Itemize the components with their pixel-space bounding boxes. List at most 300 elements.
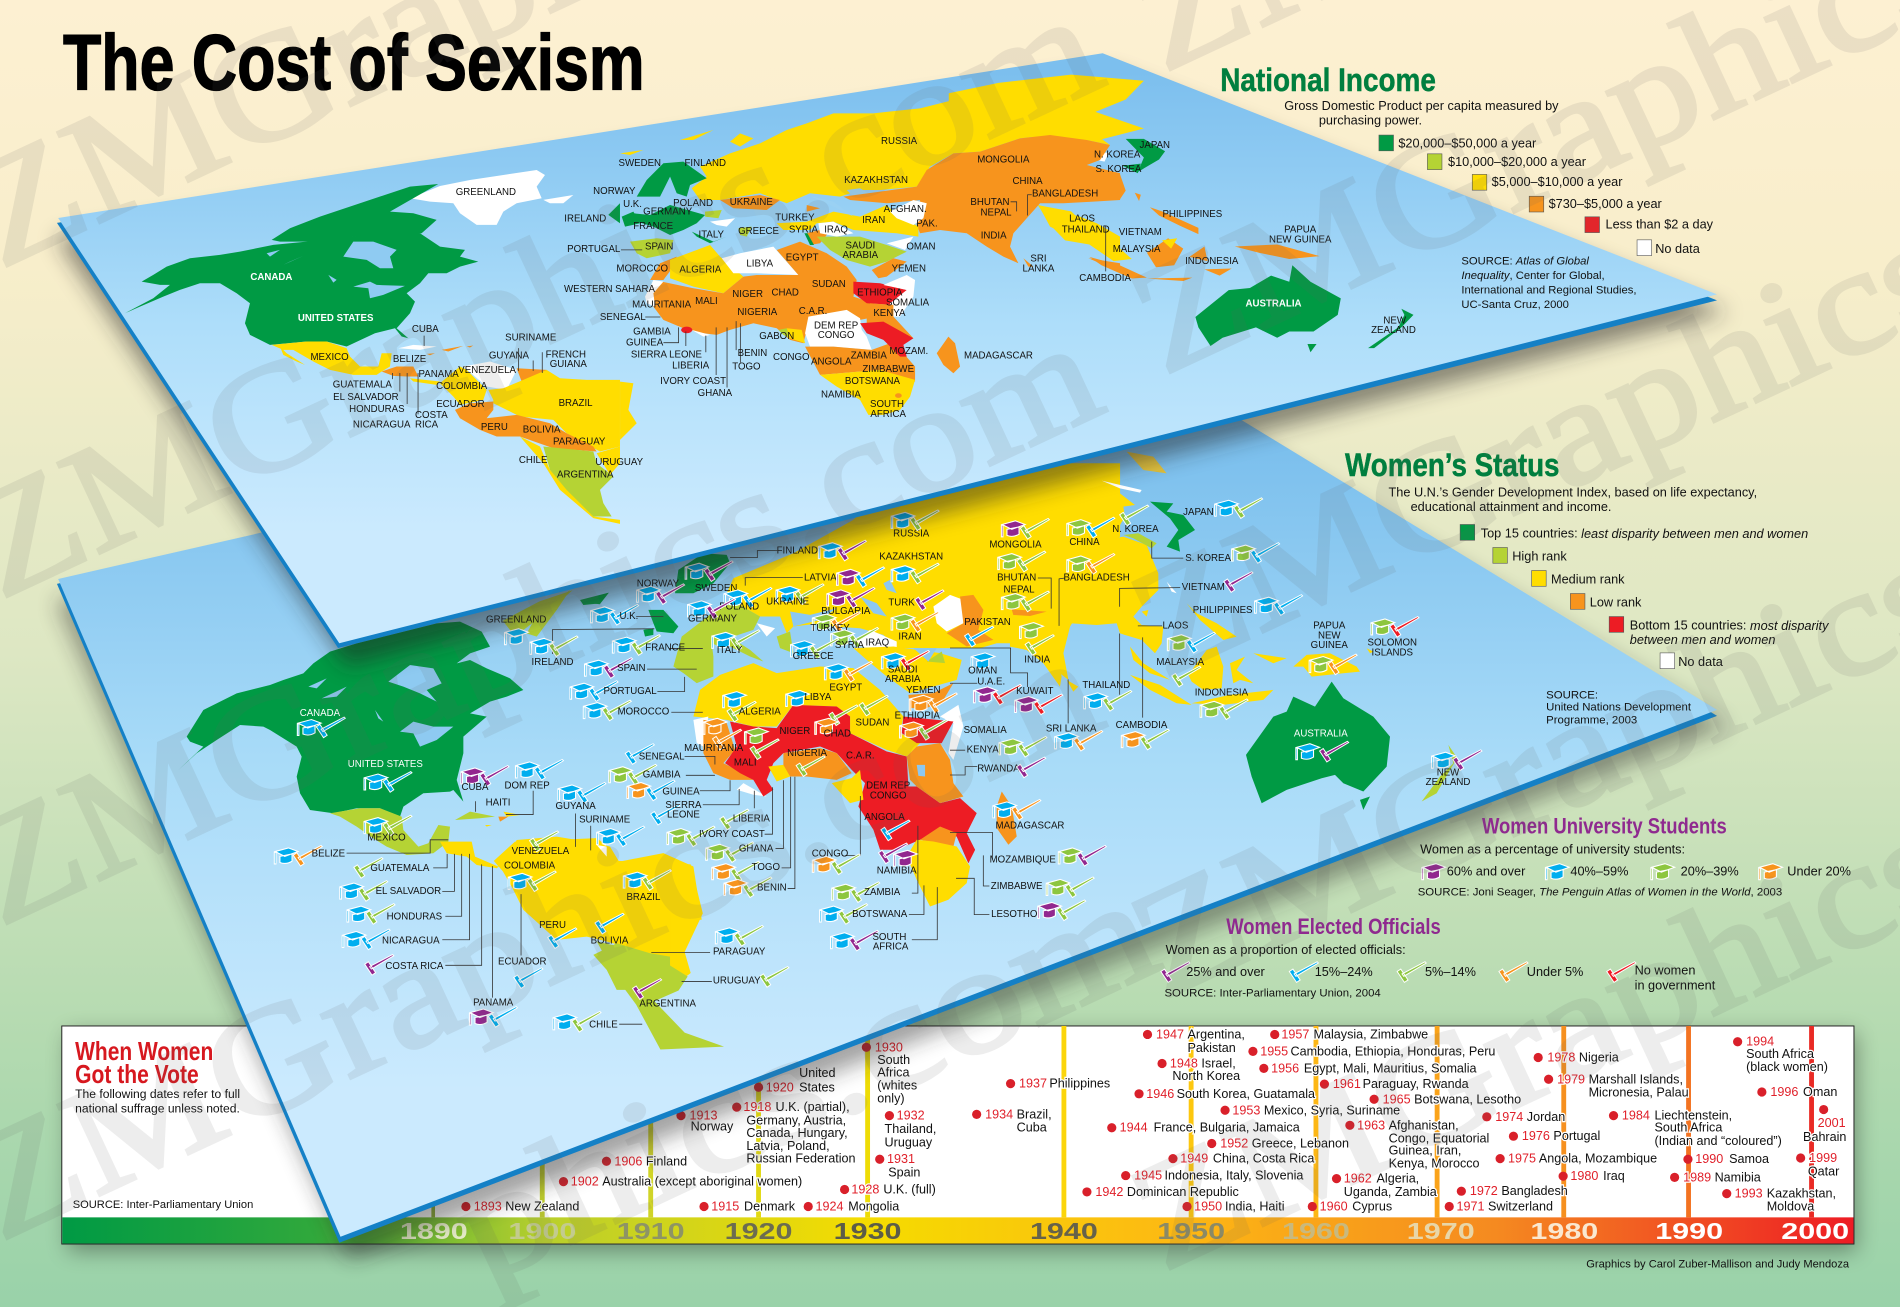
timeline text 1893-1932: U.K. (full): [883, 1183, 936, 1197]
Algeria: [723, 692, 781, 722]
timeline text 1893-1932: 1913: [689, 1109, 717, 1123]
South Africa: SOUTH: [872, 932, 906, 943]
Vietnam: [1182, 572, 1253, 593]
Senegal: SENEGAL: [639, 752, 685, 763]
women's status description: The U.N.’s Gender Development Index, based on life expectancy,: [1389, 484, 1757, 499]
legend: women's status: No data: [1678, 654, 1724, 669]
country labels: national income map: TURKEY: [775, 213, 815, 224]
New Zealand: ZEALAND: [1426, 777, 1470, 788]
timeline text 1934-1965: North Korea: [1172, 1069, 1240, 1083]
leader lines, national income map: [393, 250, 740, 414]
Portugal: [570, 681, 657, 701]
country labels: national income map: SPAIN: [645, 242, 673, 253]
legend: national income: $10,000–$20,000 a year: [1448, 154, 1587, 169]
Saudi Arabia: SAUDI: [888, 664, 918, 675]
Senegal: [625, 744, 685, 764]
country labels: national income map: AFGHAN.: [884, 204, 927, 215]
decade labels: 1930: [834, 1218, 902, 1244]
Solomon Islands: SOLOMON: [1368, 638, 1417, 649]
Nigeria: NIGERIA: [787, 748, 827, 759]
country labels: national income map: UKRAINE: [730, 197, 773, 208]
Panama: [469, 997, 517, 1027]
timeline text 1971-2001: Oman: [1803, 1085, 1837, 1099]
shadow under upper map: [56, 73, 1728, 666]
map: Europe, Africa and Asia land colours, national income: [620, 93, 1120, 440]
Germany: [688, 598, 738, 624]
timeline text 1934-1965: Botswana, Lesotho: [1414, 1092, 1521, 1106]
country labels: national income map: U.K.: [623, 199, 642, 210]
Greece: GREECE: [793, 651, 834, 662]
country labels: national income map: C.A.R.: [799, 306, 827, 317]
country labels: national income map: LIBYA: [746, 259, 774, 270]
Zimbabwe: ZIMBABWE: [991, 881, 1043, 892]
Cuba: CUBA: [462, 782, 489, 793]
Madagascar: [993, 799, 1064, 832]
source: national income: UC-Santa Cruz, 2000: [1461, 299, 1569, 311]
timeline text 1934-1965: 1955: [1260, 1044, 1288, 1058]
country labels: national income map: KAZAKHSTAN: [844, 175, 908, 186]
timeline text 1934-1965: Israel,: [1201, 1057, 1236, 1071]
Iran: IRAN: [898, 632, 922, 643]
Ethiopia: [895, 710, 948, 740]
country labels: national income map: GREECE: [738, 226, 780, 237]
country labels: national income map: SURINAME: [505, 332, 557, 343]
heading: women elected officials: Women Elected Officials: [1226, 914, 1441, 939]
legend: national income: No data: [1655, 241, 1701, 256]
country labels: national income map: CHILE: [519, 455, 548, 466]
country labels: national income map: MEXICO: [310, 352, 349, 363]
country labels: national income map: YEMEN: [892, 263, 926, 274]
Kazakhstan: KAZAKHSTAN: [879, 552, 943, 563]
Solomon Islands: [1368, 617, 1419, 658]
Finland: [777, 540, 866, 561]
legend: elected officials: Under 5%: [1527, 964, 1583, 979]
Libya: LIBYA: [805, 692, 832, 703]
timeline text 1934-1965: Afghanistan,: [1389, 1118, 1459, 1132]
Ecuador: [498, 956, 546, 988]
Honduras: [347, 904, 443, 924]
Spain: [585, 658, 645, 678]
timeline text 1934-1965: 1965: [1383, 1092, 1411, 1106]
Finland: FINLAND: [777, 546, 818, 557]
Mauritania: MAURITANIA: [684, 743, 744, 754]
timeline text 1971-2001: 1993: [1735, 1187, 1763, 1201]
legend: elected officials: 5%–14%: [1425, 964, 1476, 979]
Sweden: SWEDEN: [695, 583, 737, 594]
country labels: national income map: GUIANA: [550, 359, 587, 370]
country labels: national income map: GERMANY: [643, 206, 693, 217]
Morocco: MOROCCO: [618, 707, 670, 718]
Germany: GERMANY: [688, 613, 738, 624]
Bulgaria: BULGARIA: [821, 606, 871, 617]
Belize: BELIZE: [312, 848, 346, 859]
Chile: CHILE: [589, 1019, 618, 1030]
Saudi Arabia: [881, 650, 929, 685]
timeline text 1893-1932: South: [877, 1053, 910, 1067]
country labels: national income map: DEM REP: [814, 320, 858, 331]
decade labels: 1950: [1157, 1218, 1225, 1244]
country labels: national income map: ZAMBIA: [851, 351, 887, 362]
timeline text 1934-1965: 1945: [1134, 1169, 1162, 1183]
Nicaragua: [342, 929, 440, 950]
timeline text 1893-1932: United: [799, 1066, 836, 1080]
Namibia: NAMIBIA: [877, 865, 917, 876]
country labels: national income map: SOMALIA: [886, 297, 930, 308]
decade labels: 1970: [1407, 1218, 1475, 1244]
country labels: national income map: PORTUGAL: [567, 244, 621, 255]
heading: national income: National Income: [1220, 61, 1436, 98]
country labels: national income map: GUINEA: [626, 337, 664, 348]
Colombia: [504, 861, 556, 892]
heading: women university students: Women University Students: [1482, 813, 1727, 838]
Peru: [539, 920, 577, 948]
Iran: [891, 612, 939, 643]
Zambia: [832, 882, 901, 902]
Nigeria: [787, 748, 827, 776]
credit line: Graphics by Carol Zuber-Mallison and Judy Mendoza: [1586, 1259, 1850, 1271]
Egypt: EGYPT: [829, 683, 862, 694]
timeline text 1893-1932: (whites: [877, 1078, 917, 1092]
national income description: Gross Domestic Product per capita measured by: [1284, 98, 1559, 113]
Ghana: GHANA: [739, 844, 774, 855]
legend: women's status: Medium rank: [1551, 572, 1625, 587]
country labels: national income map: ECUADOR: [436, 399, 485, 410]
timeline text 1934-1965: 1944: [1120, 1121, 1148, 1135]
country labels: national income map: NEW GUINEA: [1269, 234, 1332, 245]
country labels: national income map: SOUTH: [870, 399, 904, 410]
New Zealand: NEW: [1437, 767, 1460, 778]
Botswana: [820, 904, 908, 924]
timeline text 1971-2001: Switzerland: [1488, 1199, 1553, 1213]
Japan: JAPAN: [1183, 507, 1214, 518]
Italy: [712, 630, 760, 656]
legend: university students: 40%–59%: [1570, 863, 1628, 878]
country labels: national income map: SIERRA LEONE: [631, 349, 703, 360]
timeline text 1934-1965: Greece, Lebanon: [1252, 1136, 1349, 1150]
timeline heading: When Women: [75, 1038, 213, 1066]
timeline text 1934-1965: 1957: [1281, 1027, 1309, 1041]
Venezuela: VENEZUELA: [512, 846, 570, 857]
Mauritania: [684, 718, 744, 754]
Chad: [815, 718, 851, 740]
timeline text 1934-1965: France, Bulgaria, Jamaica: [1154, 1121, 1300, 1135]
legend: national income: $5,000–$10,000 a year: [1492, 174, 1623, 189]
Bangladesh: BANGLADESH: [1064, 572, 1130, 583]
U.A.E.: [974, 676, 1021, 705]
Haiti: HAITI: [486, 798, 510, 809]
Congo: CONGO: [812, 848, 849, 859]
country labels: national income map: SUDAN: [812, 279, 846, 290]
Mongolia: [989, 518, 1049, 551]
legend: elected officials: 15%–24%: [1315, 964, 1373, 979]
timeline text 1934-1965: Kenya, Morocco: [1389, 1157, 1480, 1171]
Botswana: BOTSWANA: [852, 909, 908, 920]
title: The Cost of Sexism: [63, 19, 645, 107]
timeline heading: [75, 1038, 213, 1089]
U.A.E.: U.A.E.: [977, 676, 1005, 687]
country labels: national income map: NEPAL: [981, 208, 1012, 219]
timeline text 1893-1932: Finland: [646, 1154, 687, 1168]
country labels: national income map: AFRICA: [870, 409, 907, 420]
country labels: national income map: BRAZIL: [559, 398, 593, 409]
Russia: [891, 510, 939, 540]
Belize: [274, 845, 346, 866]
Ireland: IRELAND: [532, 657, 574, 668]
Poland: [719, 587, 772, 612]
Panama: PANAMA: [473, 997, 514, 1008]
country labels: national income map: CHINA: [1012, 176, 1043, 187]
Peru: PERU: [539, 920, 566, 931]
legend: national income: [1379, 135, 1714, 256]
Sudan: [855, 695, 889, 729]
country labels: national income map: ARABIA: [843, 250, 879, 261]
Costa Rica: COSTA RICA: [385, 961, 444, 972]
timeline: when women got the vote: [62, 1026, 1856, 1251]
timeline text 1971-2001: Portugal: [1553, 1129, 1600, 1143]
panel: women's status map plate: [57, 339, 1717, 1243]
Morocco: [583, 700, 670, 721]
U.K.: U.K.: [619, 611, 638, 622]
Togo: TOGO: [752, 862, 780, 873]
decade labels: 2000: [1781, 1218, 1849, 1244]
country labels: national income map: MAURITANIA: [632, 300, 692, 311]
timeline text 1893-1932: Thailand,: [885, 1122, 936, 1136]
legend: women's status: High rank: [1512, 548, 1567, 563]
country labels: national income map: NAMIBIA: [821, 389, 861, 400]
legend: women's status: between men and women: [1630, 632, 1775, 647]
timeline text 1893-1932: 1906: [614, 1154, 642, 1168]
country labels: national income map: MOZAM.: [889, 346, 928, 357]
country labels: national income map: IVORY COAST: [660, 376, 726, 387]
country labels: national income map: BANGLADESH: [1032, 188, 1098, 199]
source: elected officials: SOURCE: Inter-Parliamentary Union, 2004: [1164, 987, 1381, 999]
country labels: national income map: GUYANA: [489, 351, 530, 362]
timeline text 1971-2001: 1999: [1809, 1151, 1837, 1165]
Turkey: TURKEY: [810, 623, 850, 634]
Togo: [712, 861, 780, 882]
timeline text 1934-1965: Dominican Republic: [1127, 1185, 1239, 1199]
country labels: national income map: IRAQ: [824, 225, 848, 236]
timeline text 1893-1932: Canada, Hungary,: [746, 1126, 848, 1140]
country labels: national income map: BOTSWANA: [845, 376, 901, 387]
timeline note: [75, 1087, 240, 1115]
source: women's status: [1546, 689, 1692, 727]
timeline text 1934-1965: 1950: [1194, 1199, 1222, 1213]
timeline text 1971-2001: Angola, Mozambique: [1539, 1152, 1657, 1166]
Guatemala: GUATEMALA: [370, 863, 430, 874]
timeline text 1893-1932: Denmark: [744, 1199, 796, 1213]
Kuwait: [1015, 686, 1063, 715]
Dem Rep Congo: DEM REP: [866, 781, 910, 792]
Paraguay: PARAGUAY: [713, 947, 766, 958]
India: INDIA: [1024, 655, 1051, 666]
country labels: national income map: WESTERN SAHARA: [564, 284, 656, 295]
Zambia: ZAMBIA: [864, 887, 901, 898]
timeline text 1971-2001: Jordan: [1527, 1110, 1565, 1124]
decade labels: 1920: [725, 1218, 792, 1244]
source: national income: [1461, 256, 1637, 311]
country labels: national income map: N. KOREA: [1094, 150, 1141, 161]
country labels: national income map: CONGO: [773, 352, 810, 363]
Greenland: [486, 615, 546, 645]
country labels: national income map: ITALY: [699, 229, 725, 240]
Mozambique: [990, 845, 1106, 866]
legend: elected officials: No women: [1635, 963, 1695, 978]
legend: national income: Less than $2 a day: [1606, 217, 1714, 232]
Italy: ITALY: [717, 645, 743, 656]
C.A.R.: C.A.R.: [846, 750, 875, 761]
Ireland: [530, 636, 578, 668]
country labels: national income map: SWEDEN: [619, 158, 661, 169]
Papua New Guinea: PAPUA: [1313, 621, 1346, 632]
timeline heading: Got the Vote: [75, 1061, 199, 1089]
country labels: national income map: SENEGAL: [600, 312, 646, 323]
Guyana: [555, 783, 606, 812]
El Salvador: EL SALVADOR: [376, 886, 441, 897]
timeline text 1934-1965: 1962: [1344, 1172, 1372, 1186]
country labels: national income map: IRAN: [862, 215, 885, 226]
Sudan: SUDAN: [855, 718, 889, 729]
country labels: national income map: NORWAY: [593, 186, 636, 197]
timeline text 1893-1932: 1930: [875, 1040, 903, 1054]
country labels: national income map: PAPUA: [1284, 225, 1317, 236]
Mexico: MEXICO: [367, 833, 406, 844]
country labels: national income map: EL SALVADOR: [333, 392, 399, 403]
timeline text 1971-2001: 1972: [1470, 1184, 1498, 1198]
decade labels: 1940: [1030, 1218, 1098, 1244]
country labels: national income map: TOGO: [732, 362, 761, 373]
country labels: national income map: ARGENTINA: [557, 469, 614, 480]
Canada: [297, 708, 345, 738]
N. Korea: N. KOREA: [1112, 524, 1159, 535]
timeline text 1934-1965: 1961: [1333, 1077, 1361, 1091]
timeline text 1934-1965: 1963: [1357, 1118, 1385, 1132]
Dom Rep: DOM REP: [504, 781, 550, 792]
Iraq: IRAQ: [865, 638, 890, 649]
legend: elected officials: in government: [1635, 977, 1716, 992]
timeline text 1971-2001: 1971: [1457, 1199, 1484, 1213]
Liberia: LIBERIA: [733, 813, 770, 824]
Oman: [968, 653, 997, 677]
Norway: NORWAY: [637, 578, 680, 589]
Pakistan: PAKISTAN: [964, 617, 1011, 628]
timeline text 1934-1965: Algeria,: [1377, 1172, 1419, 1186]
Egypt: [824, 661, 872, 694]
Sierra Leone: [651, 800, 702, 825]
country labels: national income map: ALGERIA: [679, 265, 722, 276]
timeline text 1934-1965: 1949: [1180, 1152, 1208, 1166]
timeline text 1971-2001: Nigeria: [1579, 1050, 1619, 1064]
source: women's status: United Nations Development: [1546, 701, 1692, 713]
timeline text 1893-1932: Russian Federation: [746, 1152, 856, 1166]
Ivory Coast: [667, 826, 765, 847]
legend: women's status: Top 15 countries: least disparity between men and women: [1481, 525, 1808, 540]
Norway: [637, 578, 685, 604]
timeline text 1971-2001: South Africa: [1746, 1047, 1814, 1061]
country labels: national income map: FRENCH: [546, 349, 586, 360]
timeline text 1893-1932: [474, 1040, 936, 1213]
Kenya: KENYA: [967, 744, 999, 755]
country labels: national income map: MALI: [695, 296, 718, 307]
Costa Rica: [365, 955, 444, 975]
Guatemala: [354, 858, 430, 878]
timeline text 1971-2001: Micronesia, Palau: [1589, 1086, 1689, 1100]
Bolivia: BOLIVIA: [591, 936, 629, 947]
Bolivia: [591, 913, 629, 947]
Yemen: [906, 685, 957, 713]
country labels: national income map: BHUTAN: [970, 197, 1010, 208]
timeline text 1971-2001: [1457, 1035, 1846, 1213]
Congo: [812, 848, 860, 875]
United States: UNITED STATES: [348, 759, 423, 770]
legend: university students: 20%–39%: [1681, 863, 1739, 878]
timeline text 1971-2001: 1984: [1622, 1109, 1650, 1123]
Uruguay: URUGUAY: [713, 976, 761, 987]
timeline text 1971-2001: 1990: [1695, 1152, 1723, 1166]
Yemen: YEMEN: [906, 685, 941, 696]
Zimbabwe: [991, 877, 1094, 898]
timeline text 1934-1965: Cyprus: [1352, 1199, 1392, 1213]
timeline text 1893-1932: Africa: [877, 1066, 909, 1080]
Turkey: [810, 612, 860, 634]
Sri Lanka: SRI LANKA: [1046, 724, 1097, 735]
Cuba: [461, 766, 509, 793]
timeline text 1971-2001: 1996: [1770, 1085, 1798, 1099]
timeline text 1971-2001: Namibia: [1715, 1170, 1761, 1184]
legend: women's status: Bottom 15 countries: most disparity: [1630, 618, 1829, 633]
country labels: national income map: BENIN: [738, 348, 767, 359]
women's status description: [1389, 484, 1757, 514]
country labels: national income map: MOROCCO: [616, 263, 669, 274]
country labels: national income map: RICA: [415, 420, 439, 431]
South Africa: [831, 930, 909, 953]
Saudi Arabia: ARABIA: [885, 674, 921, 685]
country labels: national income map: FINLAND: [684, 158, 726, 169]
Malaysia: MALAYSIA: [1156, 657, 1205, 668]
country labels: national income map: PHILIPPINES: [1162, 209, 1223, 220]
map: east Asia islands and Oceania land colours, national income: [949, 75, 1413, 352]
country labels: national income map: UNITED STATES: [298, 313, 374, 324]
Cambodia: [1116, 720, 1169, 750]
country labels: national income map: MADAGASCAR: [964, 351, 1033, 362]
timeline text 1893-1932: Mongolia: [848, 1199, 899, 1213]
Sri Lanka: [1046, 724, 1103, 751]
timeline text 1893-1932: 1893: [474, 1199, 502, 1213]
timeline text 1893-1932: 1920: [766, 1080, 794, 1094]
country labels: national income map: GABON: [759, 331, 794, 342]
Algeria: ALGERIA: [739, 707, 781, 718]
timeline text 1934-1965: Pakistan: [1188, 1041, 1236, 1055]
timeline text 1934-1965: [985, 1027, 1521, 1213]
Syria: [831, 627, 879, 651]
timeline text 1934-1965: 1953: [1232, 1103, 1260, 1117]
timeline text 1971-2001: Moldova: [1767, 1199, 1814, 1213]
timeline text 1971-2001: Liechtenstein,: [1655, 1109, 1732, 1123]
timeline text 1934-1965: Egypt, Mali, Mauritius, Somalia: [1304, 1061, 1477, 1075]
timeline text 1934-1965: 1948: [1170, 1057, 1198, 1071]
country labels: national income map: GAMBIA: [633, 326, 671, 337]
country labels: national income map: ZIMBABWE: [862, 364, 915, 375]
S. Korea: S. KOREA: [1185, 553, 1232, 564]
map: Americas land colours, national income: [125, 170, 620, 524]
Papua New Guinea: GUINEA: [1311, 640, 1348, 651]
country labels: national income map: PERU: [481, 422, 508, 433]
legend: women's status: Low rank: [1590, 595, 1642, 610]
Japan: [1183, 498, 1263, 518]
country labels: national income map: COLOMBIA: [436, 381, 488, 392]
Solomon Islands: ISLANDS: [1372, 647, 1414, 658]
timeline text 1971-2001: Iraq: [1603, 1169, 1625, 1183]
